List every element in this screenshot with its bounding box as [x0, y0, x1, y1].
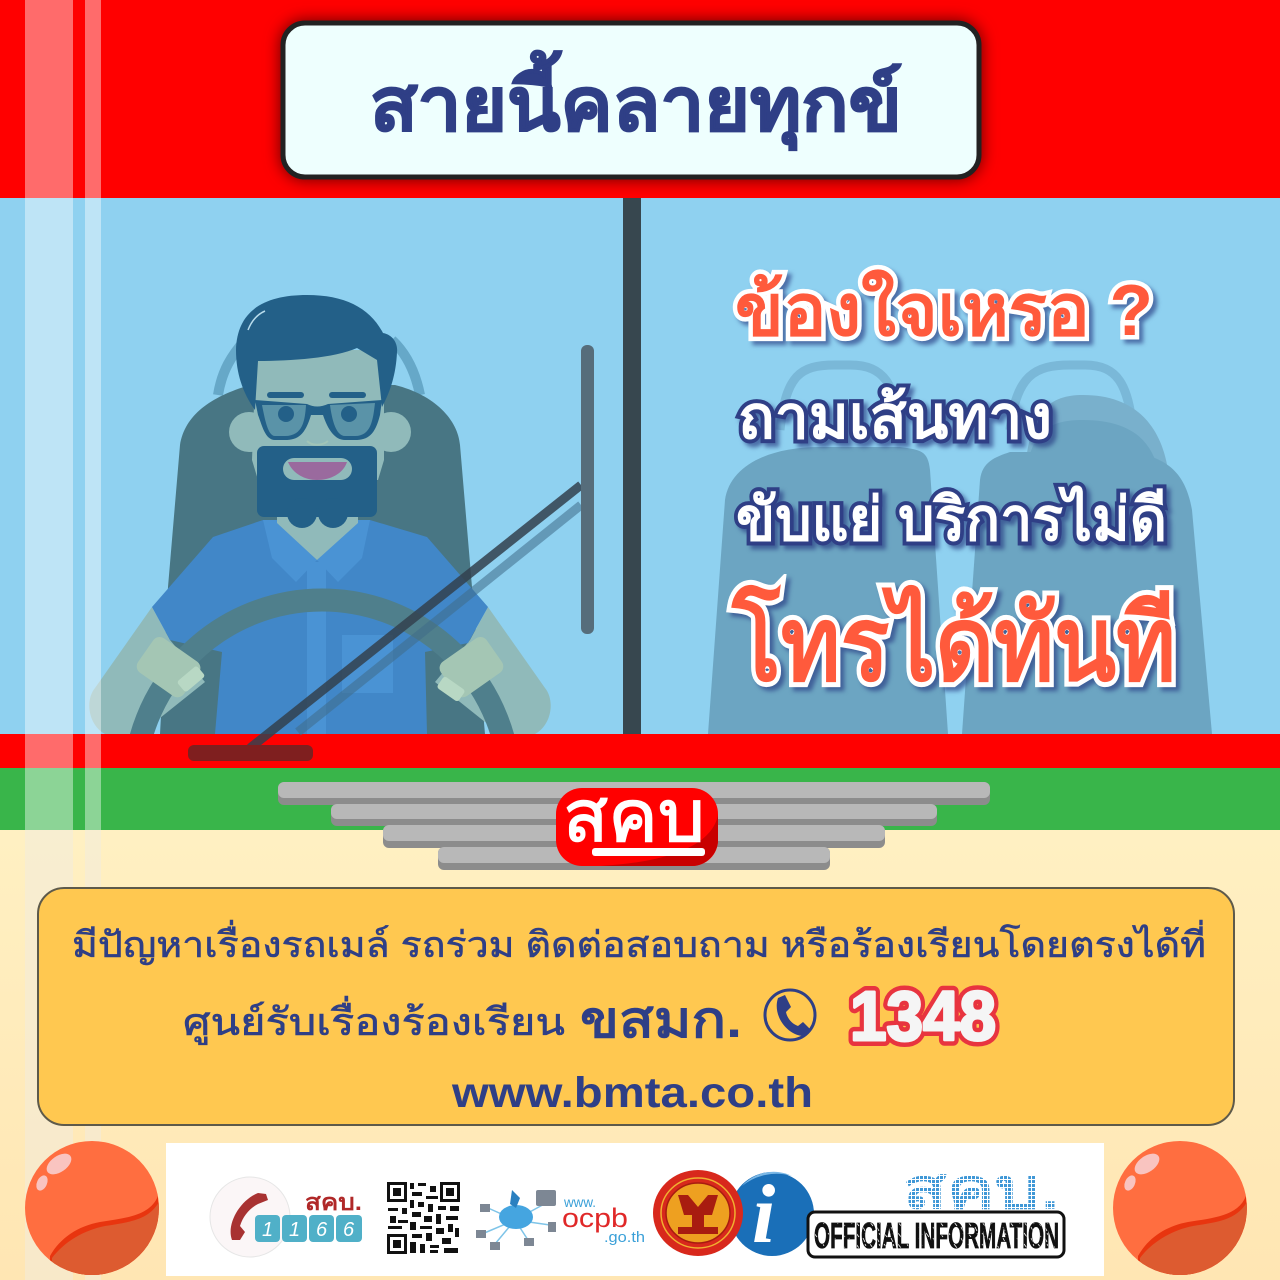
beard: [257, 446, 377, 528]
wiper: [188, 345, 594, 761]
driver illustration: [89, 198, 641, 976]
line: ถามเส้นทาง: ถามเส้นทาง: [738, 384, 1052, 451]
eyebrows: [267, 392, 366, 398]
hair highlight: [248, 311, 265, 330]
logo: 1166: 6: [316, 1219, 328, 1241]
info line 2 label: ศูนย์รับเรื่องร้องเรียน: [183, 996, 565, 1045]
QR code: [387, 1182, 460, 1254]
bus front grille: [278, 782, 990, 870]
left bus headlight: [25, 1141, 160, 1280]
logo: official information: OFFICIAL INFORMATION: [814, 1215, 1059, 1256]
driver seat: [160, 385, 485, 734]
icon: phone: [765, 990, 815, 1040]
hotline number: 1348: [850, 977, 996, 1055]
info panel: [38, 888, 1234, 1125]
nose: [307, 441, 328, 445]
logo: official information: [808, 1212, 1064, 1257]
logo: consumer protection seal: [653, 1170, 743, 1256]
hotline number: 1348: [850, 977, 996, 1055]
logo: 1166: สคบ.: [305, 1189, 362, 1215]
logo: information i: i: [752, 1168, 775, 1261]
agency name: ขสมก.: [580, 992, 742, 1048]
logo: ocpb: www.: [563, 1194, 596, 1210]
website: www.bmta.co.th: [451, 1069, 813, 1117]
driver ears: [229, 412, 411, 452]
glasses: [255, 400, 382, 440]
headline: ข้องใจเหรอ: ข้องใจเหรอ ?: [735, 268, 1153, 351]
driver arms: [89, 607, 551, 734]
driver shirt: [152, 520, 488, 734]
สคบ badge: สคบ: [563, 777, 705, 857]
logo: information i: [730, 1168, 814, 1261]
title plate: [283, 23, 979, 177]
driver hands: [134, 634, 506, 702]
driver face: [252, 350, 384, 480]
line: ขับแย่ บริการไม่ดี: ขับแย่ บริการไม่ดี: [736, 484, 1167, 553]
driver hair: [236, 295, 397, 410]
shirt collar and pocket: [263, 520, 393, 734]
logo strip: [166, 1143, 1104, 1276]
pupils: [278, 406, 357, 422]
driver neck: [277, 517, 358, 560]
mouth: [283, 458, 352, 480]
logo: สคบ dotted: สคบ.: [903, 1157, 1060, 1220]
steering wheel: [130, 588, 514, 734]
logo: ocpb: .go.th: [604, 1229, 645, 1246]
logo: ocpb: ocpb: [562, 1203, 628, 1233]
logo: ocpb: [476, 1190, 645, 1250]
glass reflection stripes: [25, 0, 101, 1280]
right bus headlight: [1113, 1141, 1248, 1280]
headline: โทรได้ทันที: โทรได้ทันที: [731, 584, 1176, 703]
info line 1: มีปัญหาเรื่องรถเมล์ รถร่วม ติดต่อสอบถาม หรือร้องเรียนโดยตรงได้ที่: [72, 920, 1206, 965]
door pillar: [623, 198, 641, 734]
logo: 1166: 6: [343, 1219, 355, 1241]
title text: สายนี้คลายทุกข์: [370, 50, 902, 151]
logo: 1166: 1: [289, 1219, 300, 1241]
logo: 1166: [210, 1177, 362, 1257]
logo: 1166: 1: [262, 1219, 273, 1241]
passenger seats: [708, 365, 1212, 734]
